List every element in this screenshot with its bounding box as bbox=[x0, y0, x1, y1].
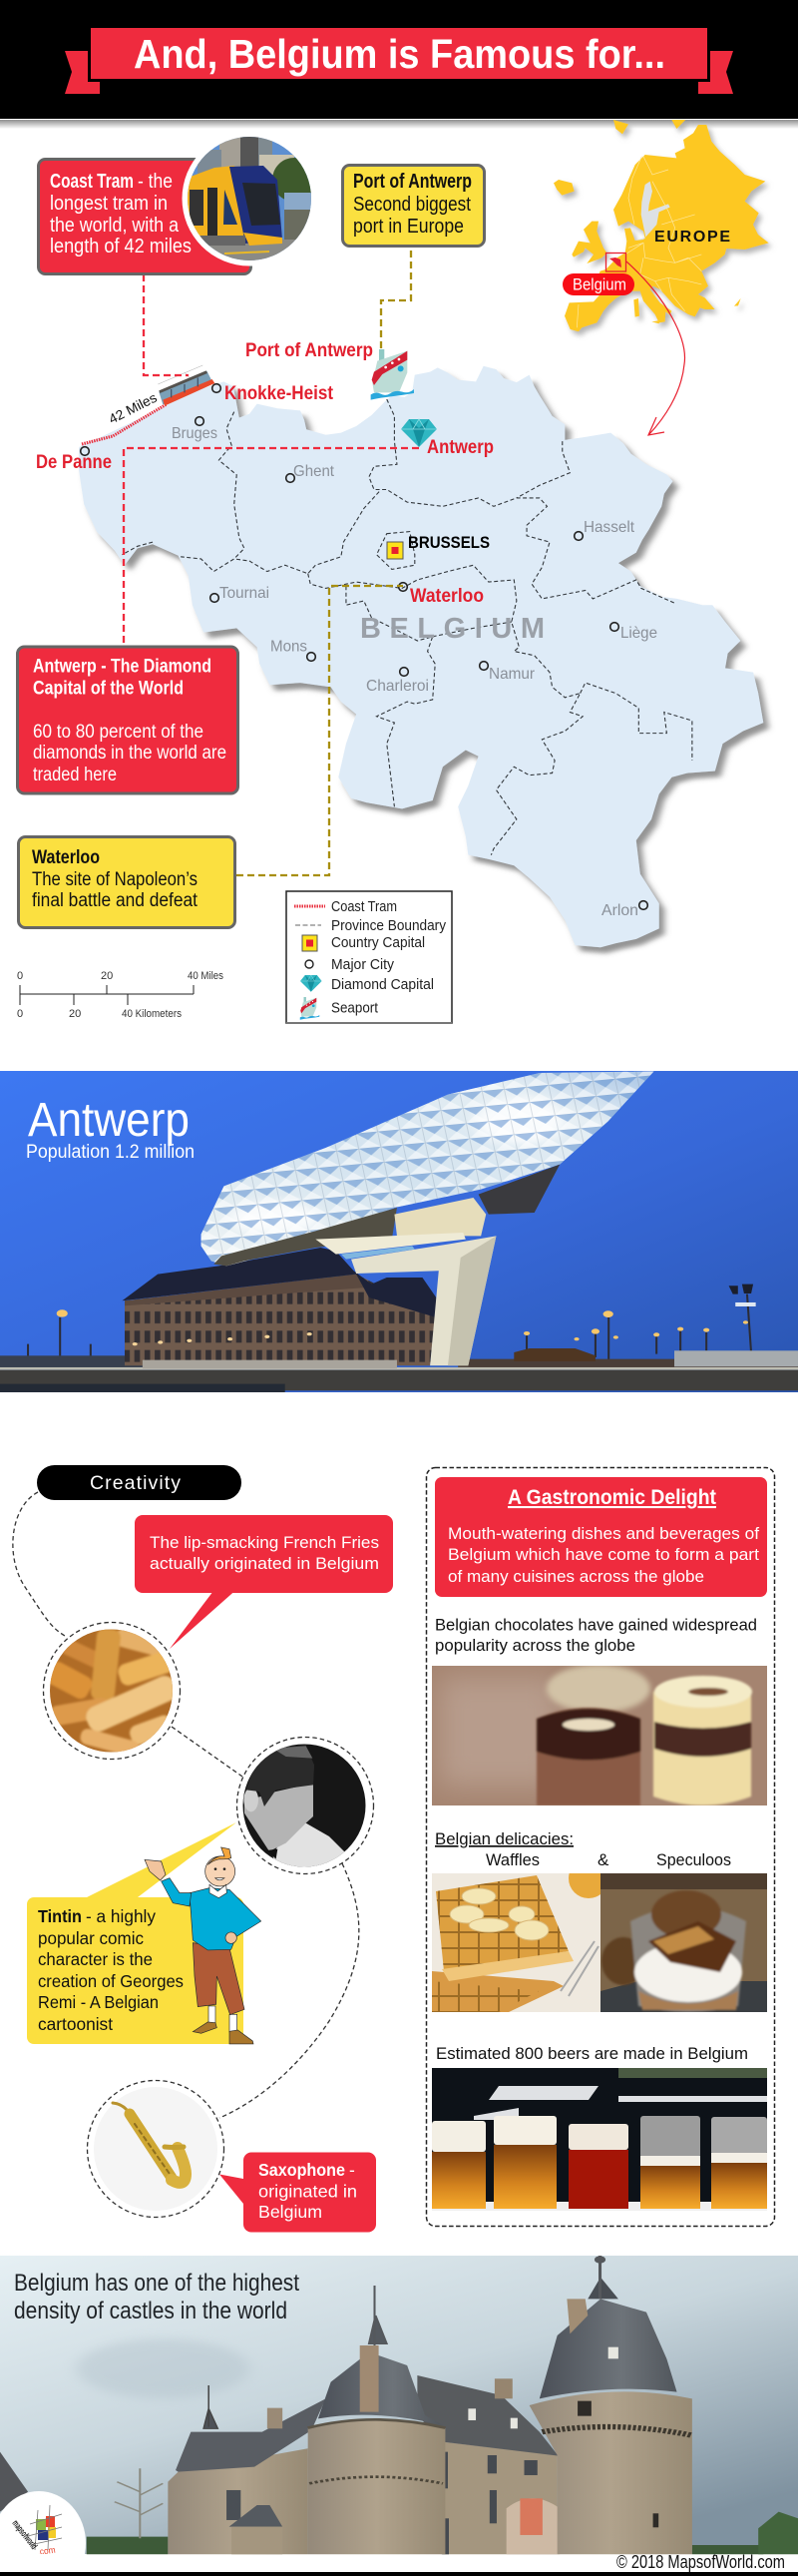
beers caption: Estimated 800 beers are made in Belgium bbox=[436, 2044, 748, 2063]
beers photo bbox=[432, 2068, 767, 2211]
red place labels: Port of Antwerp bbox=[245, 340, 373, 361]
scale bar: 20 bbox=[101, 970, 113, 982]
legend bbox=[286, 891, 452, 1023]
delicacies caption bbox=[435, 1829, 731, 1869]
legend text: Major City bbox=[331, 957, 395, 973]
europe label: EUROPE bbox=[654, 229, 730, 246]
tintin callout: - a highly bbox=[86, 1906, 156, 1926]
city labels: Namur bbox=[489, 666, 536, 683]
delicacies caption: Speculoos bbox=[656, 1850, 731, 1869]
population: Population 1.2 million bbox=[26, 1142, 195, 1163]
gastronomy heading box: Belgium which have come to form a part bbox=[448, 1545, 759, 1564]
glass volume bbox=[201, 1071, 654, 1266]
title: And, Belgium is Famous for... bbox=[134, 31, 665, 77]
saxophone callout bbox=[219, 2152, 376, 2232]
delicacies caption: & bbox=[598, 1850, 609, 1869]
callout: waterloo: Waterloo bbox=[32, 847, 100, 868]
red place labels bbox=[36, 340, 494, 607]
callout: diamond capital: 60 to 80 percent of the bbox=[33, 722, 203, 743]
left round tower bbox=[308, 2420, 445, 2554]
saxophone bbox=[113, 2103, 186, 2183]
chocolate caption bbox=[435, 1615, 757, 1655]
city labels: Arlon bbox=[601, 902, 638, 919]
icon: diamond bbox=[401, 419, 437, 447]
42 miles label: 42 Miles bbox=[107, 390, 160, 427]
middle wall and roof bbox=[443, 2442, 558, 2554]
city labels: Ghent bbox=[293, 463, 335, 480]
callout: diamond capital: traded here bbox=[33, 765, 117, 785]
icon: ship bbox=[371, 349, 414, 400]
distant clouds bbox=[77, 2338, 249, 2398]
mapsofworld logo: .com bbox=[37, 2545, 56, 2557]
icon: tram bbox=[158, 365, 214, 406]
photo panel: Antwerp port house bbox=[0, 1071, 798, 1392]
mapsofworld logo bbox=[0, 2491, 86, 2554]
gastronomy heading box: Mouth-watering dishes and beverages of bbox=[448, 1524, 759, 1543]
saxophone callout: - bbox=[349, 2160, 355, 2180]
callout text: Coast Tram bbox=[50, 171, 134, 193]
heading pill bbox=[37, 1465, 241, 1500]
legend text: Country Capital bbox=[331, 935, 425, 951]
callout text: - the bbox=[138, 171, 173, 193]
chocolate caption: Belgian chocolates have gained widespread bbox=[435, 1615, 757, 1635]
europe landmass bbox=[554, 120, 769, 331]
tintin callout: cartoonist bbox=[38, 2014, 113, 2034]
callout text: the world, with a bbox=[50, 215, 180, 237]
Belgium map bbox=[36, 340, 763, 947]
chocolate photo bbox=[432, 1665, 767, 1805]
callout text: length of 42 miles bbox=[50, 236, 192, 258]
heading pill: Creativity bbox=[90, 1472, 181, 1494]
mapsofworld logo: mapsofworld bbox=[10, 2518, 39, 2552]
coast tram route bbox=[82, 404, 167, 444]
ribbon bbox=[91, 28, 707, 79]
left wing bbox=[168, 2448, 308, 2554]
speculoos photo bbox=[600, 1873, 767, 2012]
city labels: Mons bbox=[270, 639, 307, 655]
fries callout: actually originated in Belgium bbox=[150, 1554, 379, 1573]
castle caption: Belgium has one of the highest bbox=[14, 2270, 299, 2297]
gastronomy heading box bbox=[435, 1477, 767, 1597]
waffles photo bbox=[432, 1873, 600, 2012]
delicacies caption: Belgian delicacies: bbox=[435, 1829, 574, 1848]
province boundaries bbox=[122, 399, 692, 855]
right round tower bbox=[530, 2391, 692, 2554]
callout: waterloo: The site of Napoleon’s bbox=[32, 869, 198, 890]
legend text: Province Boundary bbox=[331, 918, 447, 934]
footer band bbox=[0, 2572, 798, 2576]
city labels bbox=[172, 425, 657, 919]
belgium highlight bbox=[606, 254, 626, 271]
antwerp title: Antwerp bbox=[28, 1094, 190, 1147]
gastronomy heading box: A Gastronomic Delight bbox=[508, 1486, 716, 1509]
photo panel: castle bbox=[0, 2256, 798, 2576]
internal borders bbox=[577, 157, 701, 327]
legend text: Coast Tram bbox=[331, 899, 397, 915]
saxophone callout: Saxophone bbox=[258, 2160, 345, 2180]
fries photo bbox=[50, 1629, 173, 1753]
dashed connectors bbox=[124, 251, 419, 875]
callout text: longest tram in bbox=[50, 193, 168, 215]
left edge roof bbox=[0, 2452, 28, 2512]
callout: port of antwerp bbox=[343, 166, 485, 246]
creativity timeline bbox=[13, 1465, 393, 2232]
city labels: Charleroi bbox=[366, 678, 429, 695]
delicacies caption: Waffles bbox=[486, 1850, 540, 1869]
callout: waterloo: final battle and defeat bbox=[32, 890, 199, 911]
red place labels: De Panne bbox=[36, 452, 112, 473]
tintin callout bbox=[27, 1822, 243, 2044]
callout: port of antwerp: Second biggest bbox=[353, 194, 471, 216]
sax photo bbox=[94, 2087, 217, 2211]
city markers bbox=[81, 384, 647, 909]
tree lines bbox=[87, 2537, 763, 2554]
callout: port of antwerp: port in Europe bbox=[353, 216, 464, 238]
far lights and lamp posts bbox=[28, 1294, 752, 1369]
panel: gastronomic delight bbox=[427, 1467, 774, 2226]
red place labels: Waterloo bbox=[410, 586, 484, 607]
legend text bbox=[331, 899, 447, 1016]
scale bar: 0 bbox=[17, 1008, 23, 1020]
legend text: Diamond Capital bbox=[331, 977, 434, 993]
callout: diamond capital bbox=[18, 647, 237, 793]
lattice underside bbox=[479, 1165, 560, 1215]
saxophone callout: Belgium bbox=[258, 2202, 322, 2222]
scale bar: 0 bbox=[17, 970, 23, 982]
legend symbols bbox=[294, 904, 325, 908]
city labels: Hasselt bbox=[584, 519, 635, 536]
gastronomy heading box: of many cuisines across the globe bbox=[448, 1567, 704, 1586]
dashed path bbox=[13, 1492, 373, 2218]
tintin callout: creation of Georges bbox=[38, 1971, 184, 1991]
cartoonist portrait bbox=[243, 1745, 365, 1866]
capital label: BRUSSELS bbox=[408, 533, 490, 552]
scale bar: 20 bbox=[69, 1008, 81, 1020]
header band bbox=[0, 0, 798, 129]
scale bar bbox=[17, 970, 223, 1020]
saxophone callout: originated in bbox=[258, 2182, 357, 2202]
ribbon tails bbox=[65, 51, 733, 94]
fries callout: The lip-smacking French Fries bbox=[150, 1533, 379, 1552]
Baltic sea bbox=[635, 182, 670, 241]
scale bar: 40 Miles bbox=[188, 970, 223, 982]
callout: diamond capital: diamonds in the world are bbox=[33, 743, 226, 764]
castle caption bbox=[14, 2270, 299, 2324]
callout: coast tram bbox=[38, 132, 317, 273]
city labels: Liège bbox=[620, 625, 657, 642]
callout: diamond capital: Capital of the World bbox=[33, 679, 184, 699]
legend text: Seaport bbox=[331, 1000, 378, 1016]
tintin callout: Remi - A Belgian bbox=[38, 1992, 159, 2012]
sea wall and quay bbox=[0, 1355, 168, 1369]
tintin figure bbox=[145, 1847, 261, 2044]
scale bar: 40 Kilometers bbox=[122, 1008, 182, 1020]
country outline bbox=[79, 366, 763, 947]
callout: waterloo bbox=[18, 836, 235, 928]
callout text bbox=[50, 171, 192, 258]
tintin callout: popular comic bbox=[38, 1928, 144, 1948]
capital marker bbox=[387, 542, 403, 559]
tram photo bbox=[188, 137, 316, 261]
chocolate caption: popularity across the globe bbox=[435, 1636, 635, 1655]
Europe locator map bbox=[554, 120, 769, 435]
historic building bbox=[125, 1275, 435, 1365]
tintin callout: Tintin bbox=[38, 1906, 82, 1926]
white concrete bridge bbox=[394, 1198, 486, 1236]
callout: diamond capital: Antwerp - The Diamond bbox=[33, 657, 211, 677]
castle caption: density of castles in the world bbox=[14, 2298, 287, 2324]
red place labels: Knokke-Heist bbox=[224, 383, 334, 404]
city labels: Bruges bbox=[172, 425, 217, 442]
city labels: Tournai bbox=[219, 585, 269, 602]
belgium label: BELGIUM bbox=[360, 613, 545, 645]
callout: port of antwerp: Port of Antwerp bbox=[353, 171, 472, 193]
belgium pill: Belgium bbox=[573, 275, 626, 293]
tintin callout: character is the bbox=[38, 1949, 153, 1969]
arrow to main map bbox=[626, 261, 684, 435]
red place labels: Antwerp bbox=[427, 437, 494, 458]
fries callout bbox=[135, 1515, 393, 1649]
